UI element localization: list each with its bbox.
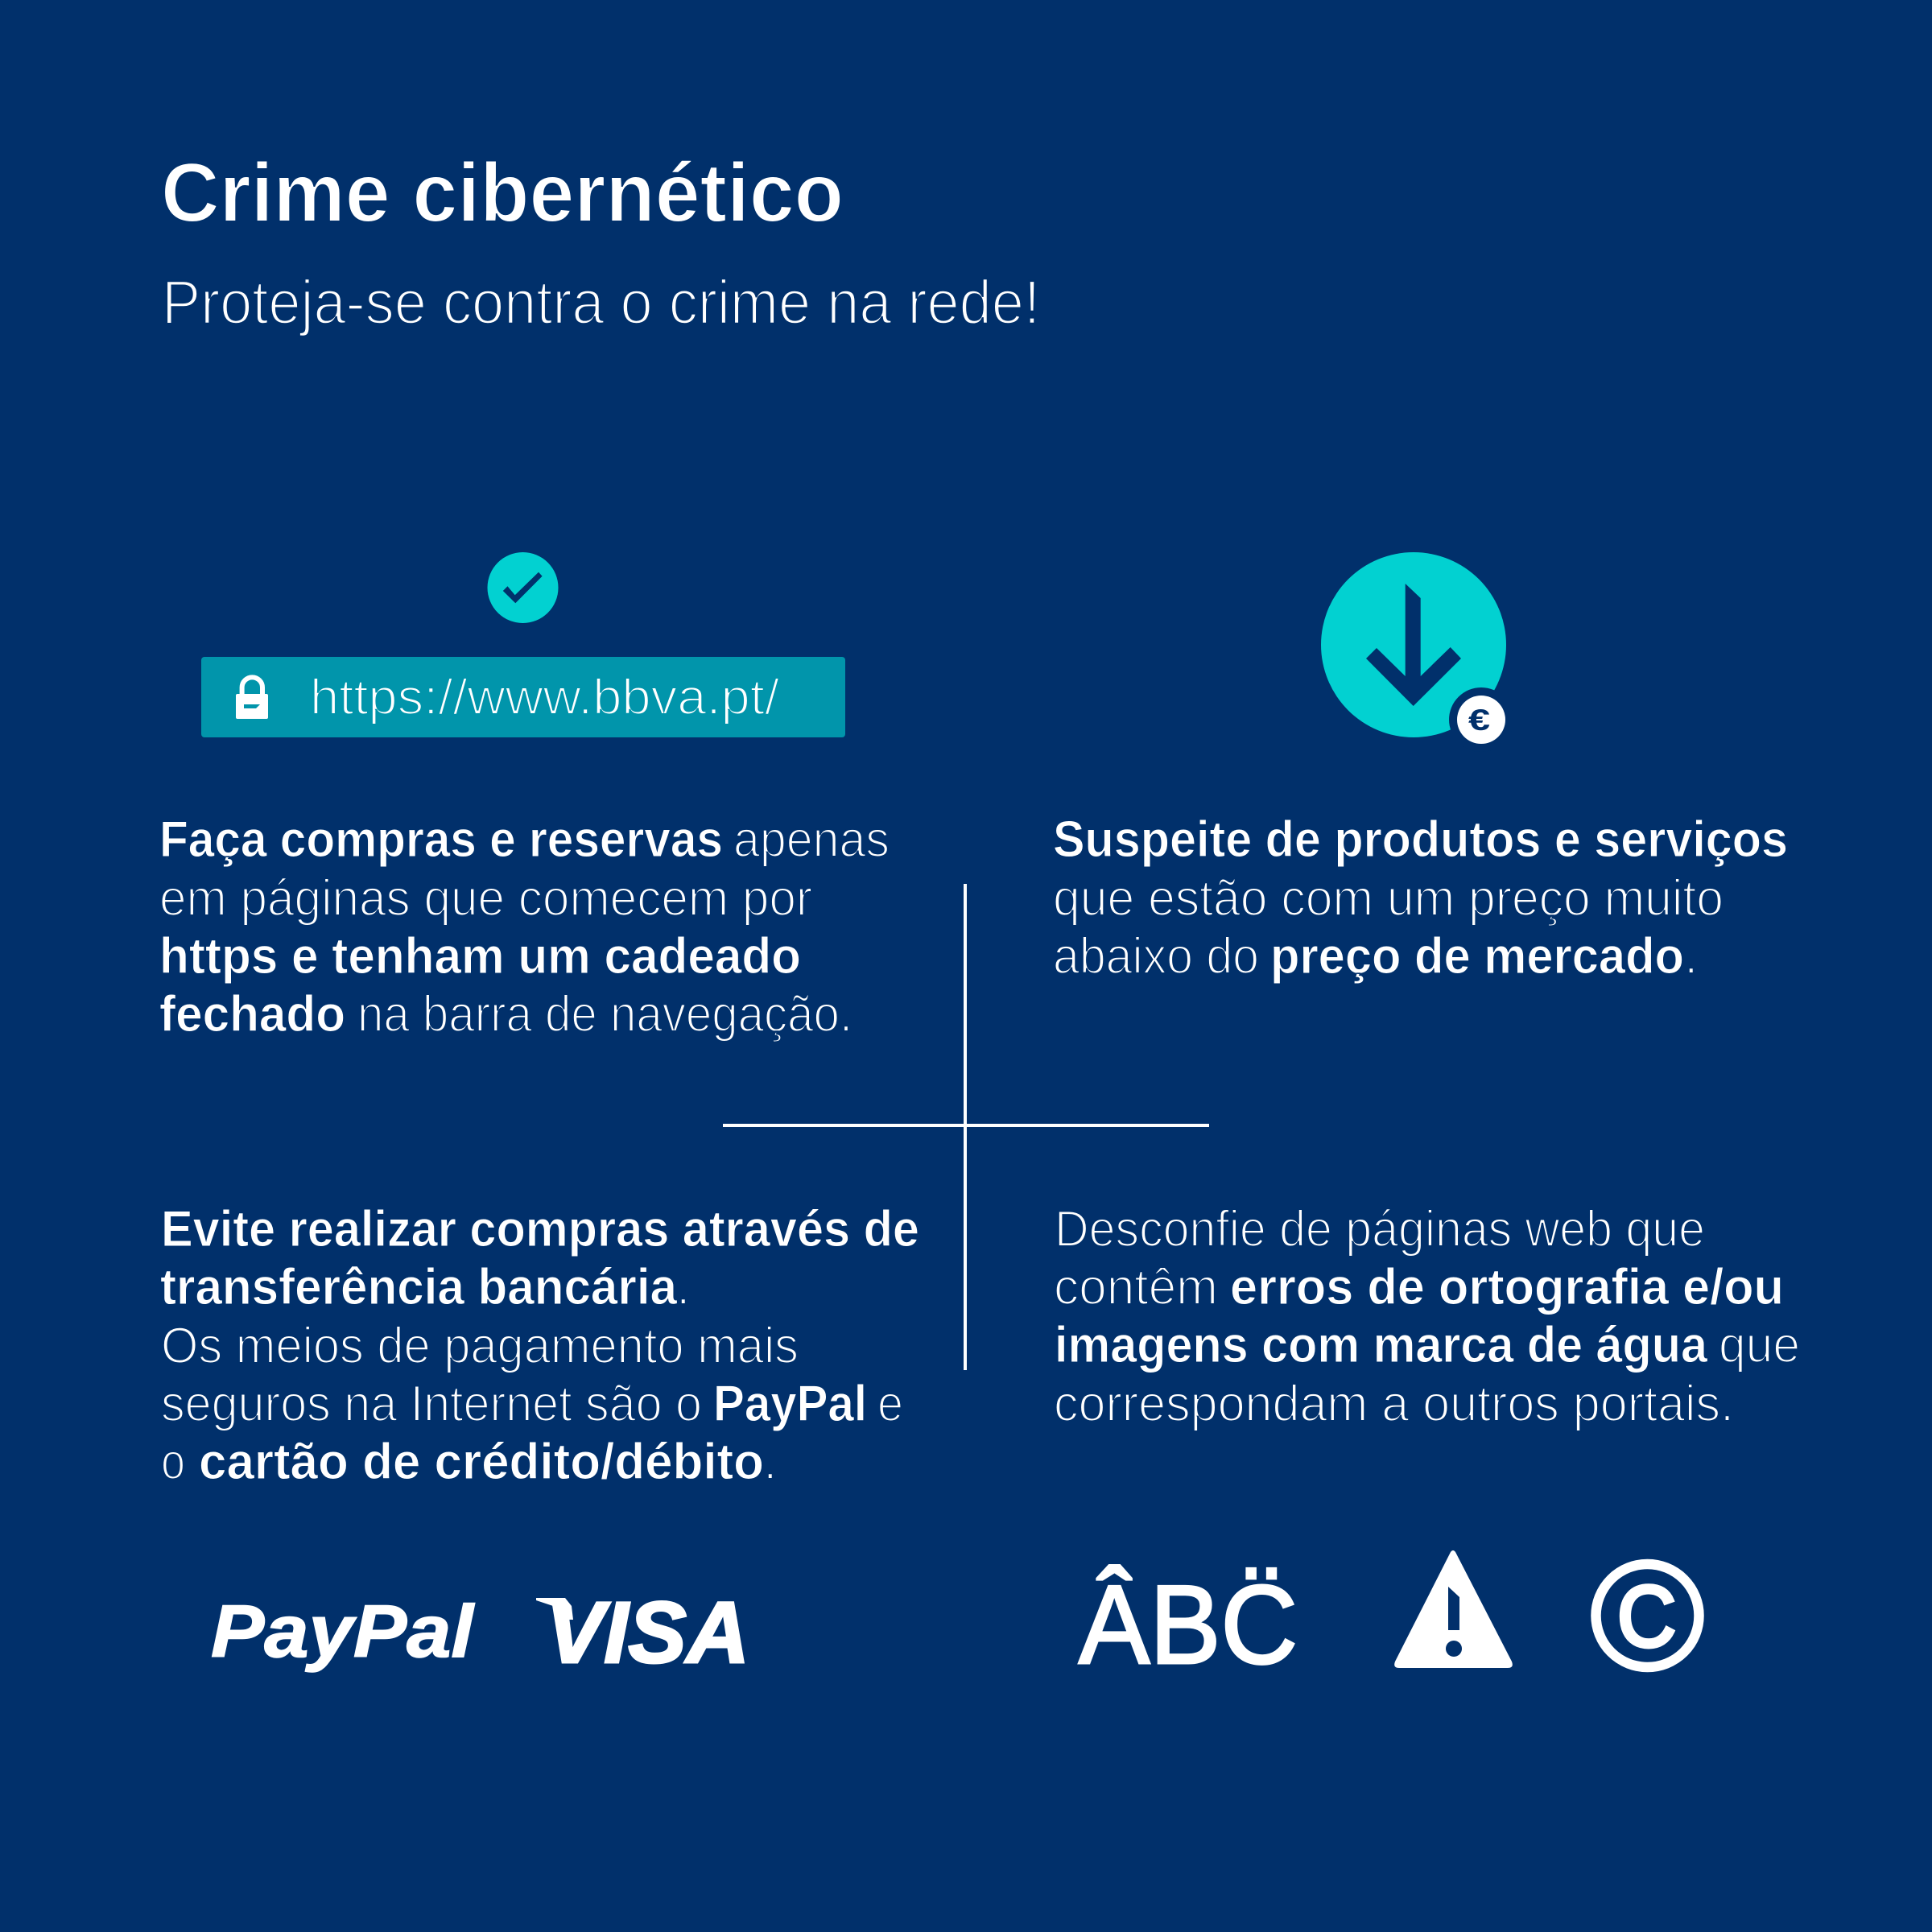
text block: payment methods: . <box>676 1259 691 1315</box>
text block: suspicious prices: preço de mercado <box>1270 928 1684 985</box>
text block: payment methods: Os meios de pagamento mais <box>161 1318 799 1374</box>
text block: payment methods: e <box>877 1376 903 1432</box>
title: Crime cibernético <box>161 147 844 240</box>
logo: PayPal: PayPal <box>211 1591 476 1673</box>
icon: copyright <box>1596 1564 1699 1667</box>
icon: warning triangle <box>1394 1550 1513 1668</box>
text block: https advice: https e tenham um cadeado <box>159 928 801 985</box>
text block: https advice: Faça compras e reservas <box>159 811 723 868</box>
text block: spelling errors and watermarks: que <box>1719 1317 1800 1373</box>
text block: spelling errors and watermarks: correspondam a outros portais. <box>1054 1376 1734 1432</box>
subtitle: Proteja-se contra o crime na rede! <box>162 268 1040 337</box>
text block: payment methods: Evite realizar compras através de <box>161 1201 919 1257</box>
address bar: https://www.bbva.pt/ <box>310 670 780 725</box>
logo: VISA: VISA <box>546 1583 749 1681</box>
text block: payment methods: PayPal <box>713 1376 867 1432</box>
text block: payment methods: transferência bancária <box>160 1259 678 1315</box>
text block: spelling errors and watermarks: Desconfie de páginas web que <box>1055 1201 1705 1257</box>
text block: payment methods: cartão de crédito/débito <box>199 1434 764 1490</box>
text block: https advice: apenas <box>733 811 890 868</box>
icon: misspelled letters: ÂBC̈ <box>1079 1563 1298 1687</box>
icon: copyright: C <box>1617 1567 1676 1665</box>
text block: spelling errors and watermarks: imagens com marca de água <box>1055 1317 1708 1373</box>
text block: payment methods <box>160 1201 919 1490</box>
text block: suspicious prices: abaixo do <box>1053 928 1259 985</box>
text block: https advice: fechado <box>159 986 345 1042</box>
icon: price down arrow with euro <box>1321 552 1513 752</box>
icon: check badge <box>488 552 559 623</box>
text block: spelling errors and watermarks: contêm <box>1054 1259 1218 1315</box>
text block: https advice <box>159 811 890 1042</box>
icon: price down arrow with euro: € <box>1468 704 1490 737</box>
text block: suspicious prices: Suspeite de produtos e serviços <box>1053 811 1788 868</box>
text block: suspicious prices: que estão com um preço muito <box>1053 870 1724 927</box>
text block: payment methods: o <box>161 1434 185 1490</box>
text block: suspicious prices <box>1053 811 1788 985</box>
text block: spelling errors and watermarks: erros de ortografia e/ou <box>1230 1259 1784 1315</box>
text block: https advice: na barra de navegação. <box>357 986 852 1042</box>
text block: https advice: em páginas que comecem por <box>159 870 812 927</box>
text block: suspicious prices: . <box>1684 928 1699 985</box>
text block: spelling errors and watermarks <box>1054 1201 1800 1432</box>
text block: payment methods: seguros na Internet são o <box>161 1376 702 1432</box>
address bar <box>201 657 845 737</box>
text block: payment methods: . <box>763 1434 778 1490</box>
divider cross <box>723 884 1209 1370</box>
